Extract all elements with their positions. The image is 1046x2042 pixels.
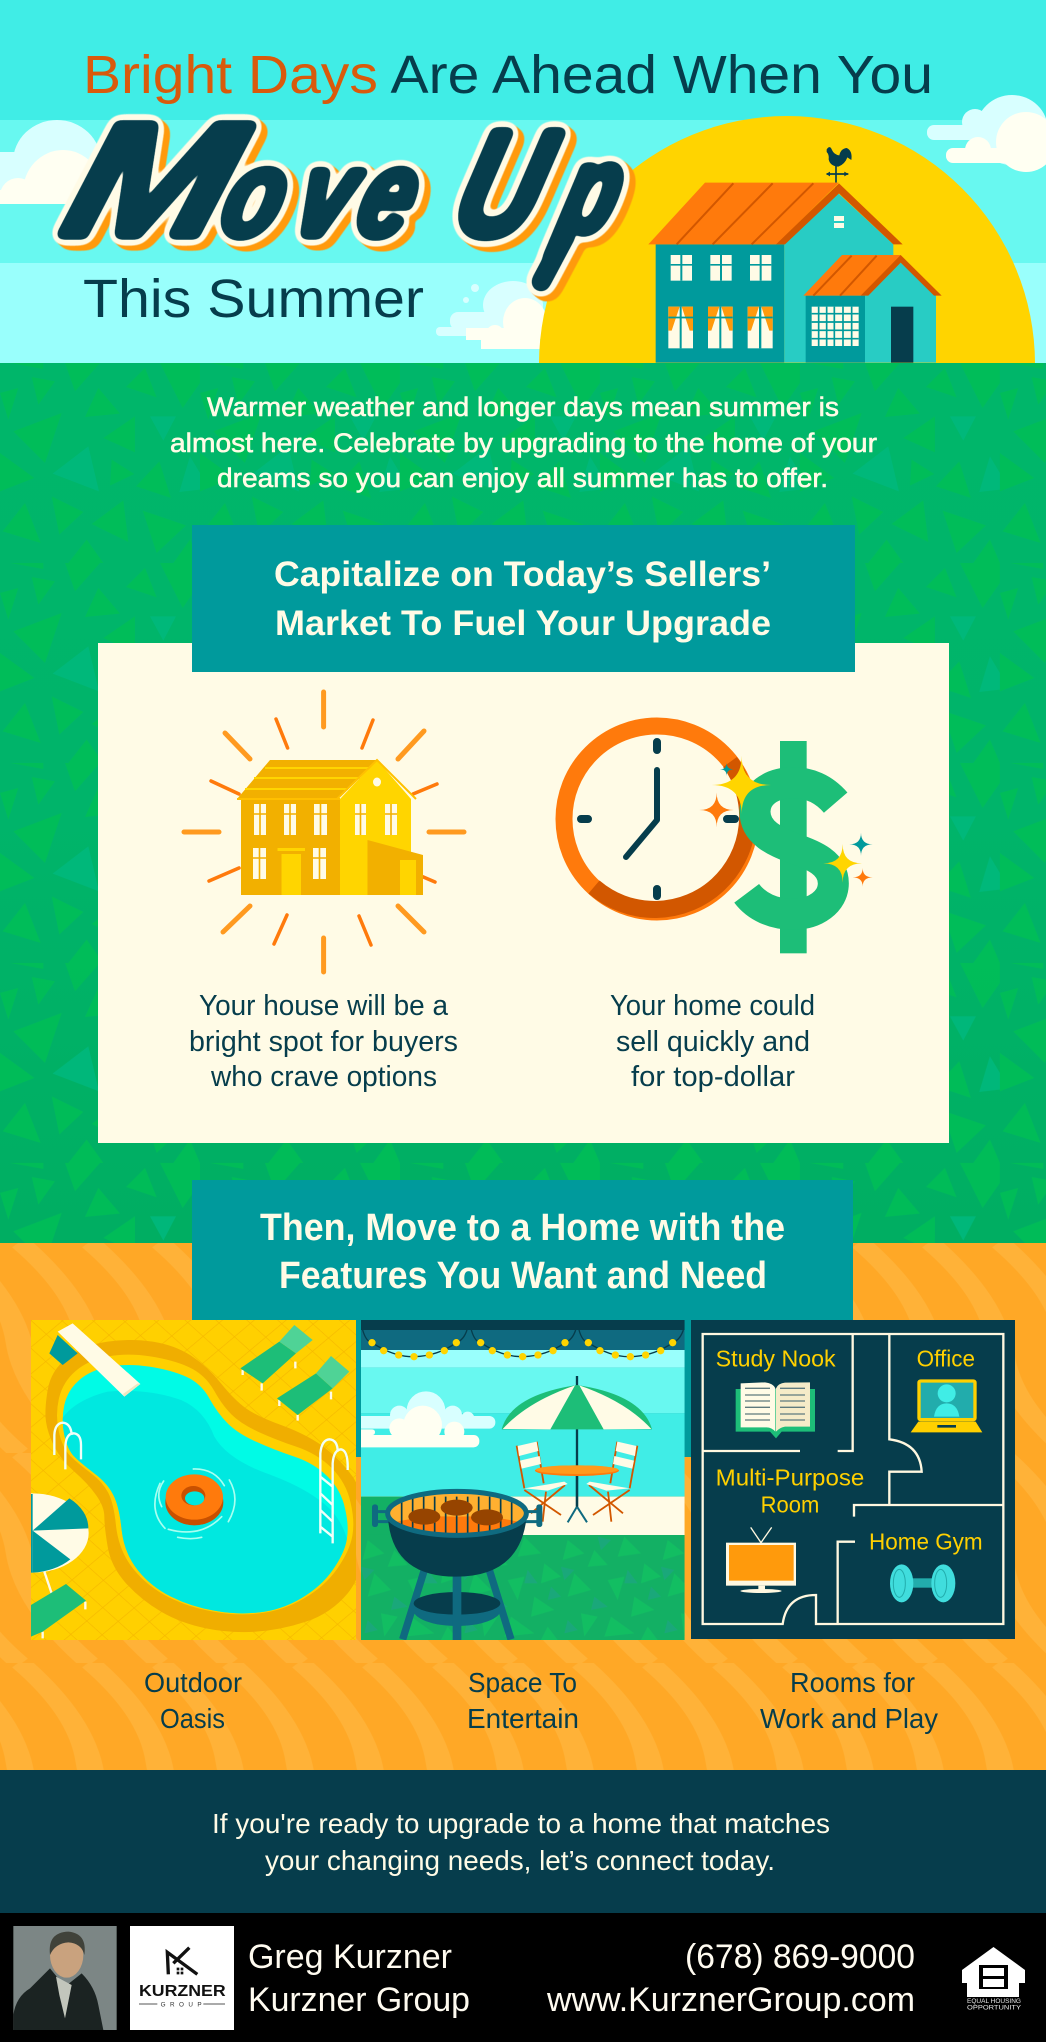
sparkles [699, 756, 873, 887]
patio umbrella [502, 1376, 652, 1507]
equal housing logo [962, 1947, 1025, 2012]
call to action band: your changing needs, let’s connect today. [265, 1845, 775, 1876]
loungers [31, 1325, 349, 1638]
intro text: dreams so you can enjoy all summer has to offer. [217, 463, 828, 493]
heading: capitalize [192, 525, 855, 672]
title script: Move Up [46, 88, 640, 282]
green patterned background [0, 363, 1046, 1243]
diving board [49, 1323, 140, 1397]
floor plan walls [703, 1334, 1003, 1624]
sun rays [184, 692, 464, 972]
dollar sign [699, 741, 873, 953]
contact details: www.KurznerGroup.com [546, 1981, 915, 2019]
equal housing logo: EQUAL HOUSING [967, 1998, 1021, 2005]
agent name: Greg Kurzner [248, 1938, 452, 1976]
panel: floor plan [691, 1320, 1015, 1639]
footer bar [0, 1913, 1046, 2042]
main roof [648, 183, 903, 244]
pool deck border [45, 1340, 364, 1632]
grill [372, 1487, 542, 1639]
contact details: (678) 869-9000 [685, 1938, 915, 1976]
sky background bands [0, 0, 1046, 363]
label: space to entertain: Entertain [467, 1703, 579, 1734]
icon: laptop [911, 1381, 982, 1432]
sun [539, 116, 1035, 363]
panel: sellers market [98, 643, 949, 1143]
intro text: Warmer weather and longer days mean summer is [207, 392, 839, 422]
text: clock caption: Your home could [610, 990, 815, 1022]
beach umbrella [31, 1493, 89, 1573]
agent photo [13, 1926, 117, 2030]
logo: Kurzner Group: KURZNER [139, 1983, 226, 2000]
icon: dumbbell [890, 1564, 955, 1602]
logo: Kurzner Group [130, 1926, 234, 2030]
title script: Move Up: U [439, 98, 574, 269]
text: clock caption [610, 990, 815, 1093]
swim ring [155, 1469, 235, 1539]
cloud: upper right [927, 95, 1046, 172]
panel: patio [354, 1320, 685, 1640]
pool water [62, 1365, 348, 1614]
cloud [354, 1391, 495, 1447]
text: clock caption: for top-dollar [631, 1061, 795, 1093]
title script: Move Up: o [208, 124, 306, 262]
label: outdoor oasis [144, 1667, 242, 1734]
room labels: Multi-Purpose [716, 1465, 864, 1491]
text: clock caption: sell quickly and [616, 1026, 810, 1058]
title script: Move Up: M [46, 88, 265, 271]
contact details [546, 1938, 915, 2019]
room labels [716, 1346, 983, 1554]
heading: features: Features You Want and Need [279, 1255, 767, 1297]
clock [564, 726, 750, 912]
lower curtained windows [668, 307, 773, 348]
logo: Kurzner Group: GROUP [161, 2002, 202, 2009]
call to action band [0, 1770, 1046, 1913]
heading: capitalize: Market To Fuel Your Upgrade [275, 604, 771, 643]
room labels: Home Gym [869, 1528, 983, 1554]
intro text [170, 392, 877, 493]
house windows [253, 778, 397, 879]
cloud: left [0, 120, 97, 204]
label: rooms for work and play: Rooms for [790, 1667, 915, 1698]
room labels: Study Nook [716, 1346, 836, 1372]
text: house caption: bright spot for buyers [189, 1026, 458, 1058]
rooster weather vane [826, 147, 852, 183]
text: house caption: who crave options [210, 1061, 437, 1093]
title script: Move Up: v [283, 124, 379, 262]
pool ladders [54, 1423, 348, 1543]
panel: pool [31, 1320, 356, 1640]
title script: Move Up: p [545, 120, 640, 259]
title line 1: Bright Days Are Ahead When You [83, 45, 933, 105]
icon: television [726, 1527, 796, 1593]
patio chairs [517, 1442, 637, 1522]
icon: clock and dollar [564, 726, 873, 953]
label: rooms for work and play: Work and Play [760, 1703, 938, 1734]
gable window [834, 216, 844, 228]
heading: features: Then, Move to a Home with the [260, 1207, 785, 1249]
text: house caption: Your house will be a [199, 990, 449, 1022]
cloud: centre [436, 281, 547, 349]
side wing [803, 255, 942, 363]
agent name: Kurzner Group [248, 1981, 470, 2019]
label: space to entertain: Space To [468, 1667, 577, 1698]
intro text: almost here. Celebrate by upgrading to the home of your [170, 428, 877, 458]
equal housing logo: OPPORTUNITY [967, 2004, 1022, 2012]
label: space to entertain [467, 1667, 579, 1734]
heading: features [192, 1180, 853, 1457]
heading: capitalize: Capitalize on Today’s Sellers’ [274, 555, 771, 594]
patio table [535, 1465, 619, 1522]
agent name [248, 1938, 470, 2019]
room labels: Office [917, 1346, 975, 1372]
house [648, 147, 942, 363]
call to action band: If you're ready to upgrade to a home that matches [212, 1808, 830, 1839]
house body [241, 799, 341, 895]
title line 3: This Summer [83, 269, 424, 329]
main house walls [656, 193, 893, 363]
upper windows [671, 255, 771, 281]
icon: book [736, 1382, 815, 1438]
text: house caption [189, 990, 458, 1093]
string lights [363, 1330, 683, 1360]
title script: Move Up: e [344, 124, 436, 262]
label: outdoor oasis: Outdoor [144, 1667, 242, 1698]
label: outdoor oasis: Oasis [160, 1703, 225, 1734]
orange wave background [0, 1243, 1046, 1770]
label: rooms for work and play [760, 1667, 938, 1734]
room labels: Room [761, 1492, 819, 1518]
icon: shining house [184, 692, 464, 972]
